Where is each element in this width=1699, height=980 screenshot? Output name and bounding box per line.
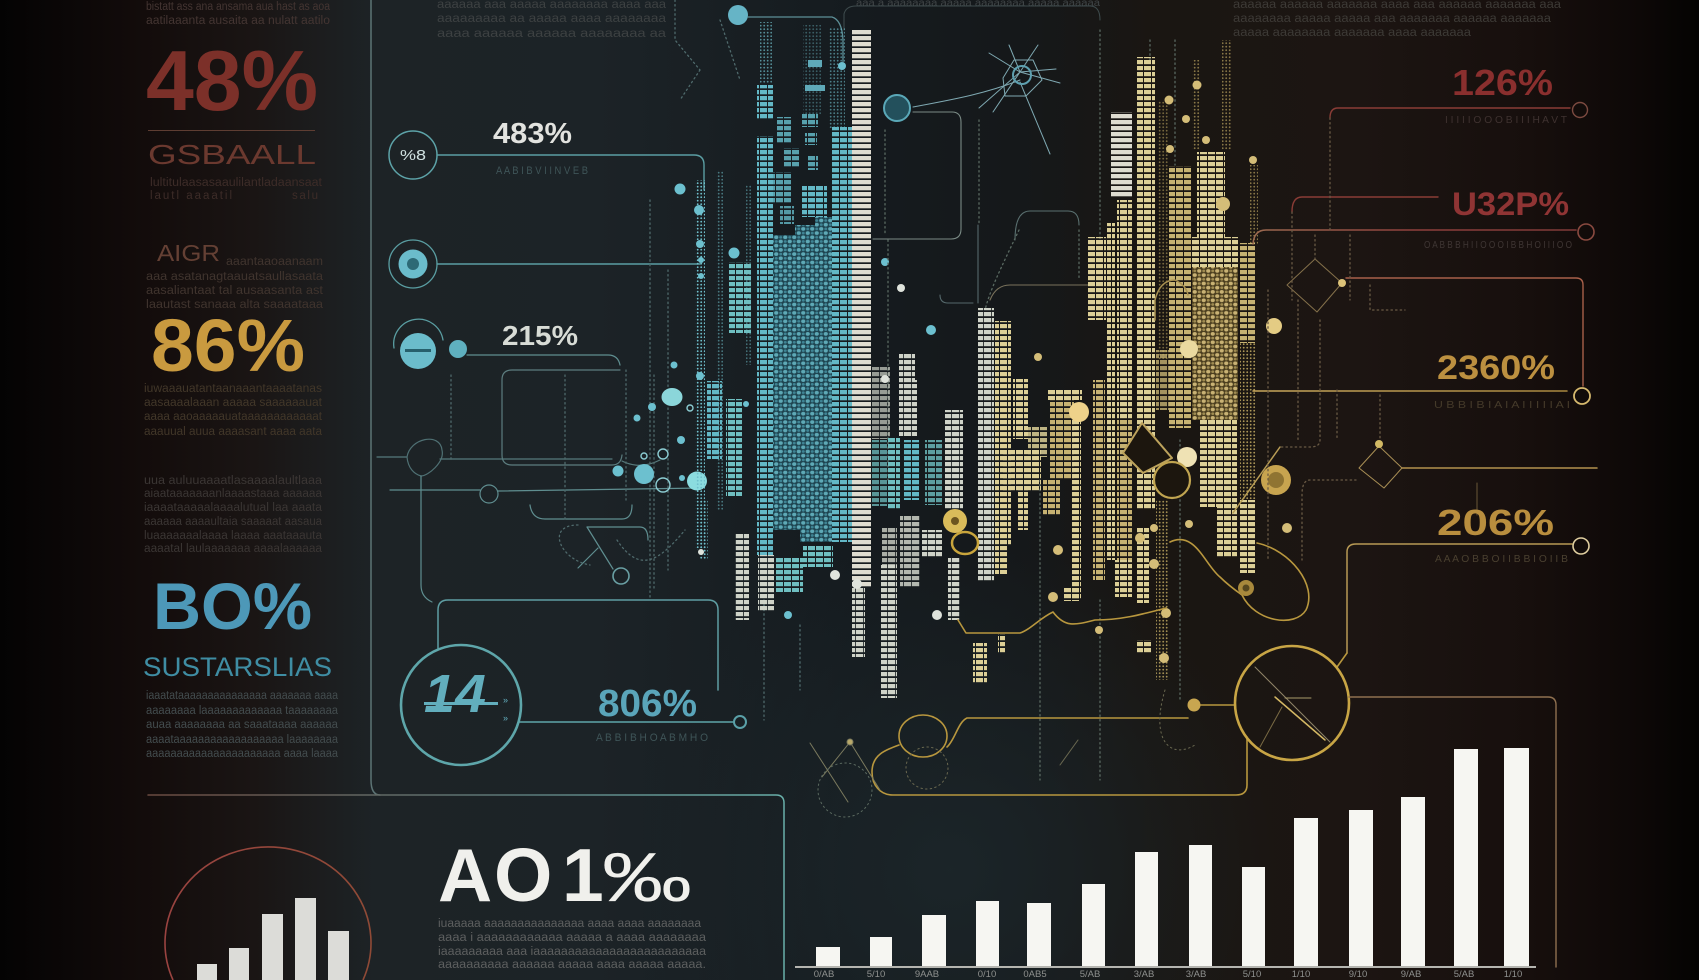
panel: left column statistics [143,1,339,760]
axis labels: 5/AB [1454,969,1474,980]
body text under 86%: aaauual auua aaaasant aaaa aata [144,426,323,438]
bar chart [795,748,1536,980]
body text block middle: iaaaataaaaalaaaalutual laa aaata [144,502,323,514]
summary body text: aaaa i aaaaaaaaaaaa aaaaa a aaaa aaaaaaaa [438,932,707,944]
body text above 86% [146,256,324,311]
summary body text: aaaaaaaaaa aaaaaa aaaaa aaaa aaaaa aaaaa. [438,959,706,971]
top caption right: aaaaa aaaaaaaa aaaaaaa aaaa aaaaaaa [1233,27,1472,39]
stat: B0%: BO% [153,569,312,643]
summary body text: iaaaaaaaaa aaa iaaaaaaaaaaaaaaaaaaaaaaaaa [438,946,707,958]
top caption right [1233,0,1562,39]
ring 206% [1573,538,1589,554]
panel: teal connector network [377,0,936,765]
teal columns [707,85,852,620]
gold node dot [1188,698,1200,712]
teal cell mass [773,217,832,542]
caption under 48%: salu [292,190,318,202]
stat: 215%: 215% [502,320,578,351]
connector 206% [1347,544,1572,653]
caption 806%: A B B I B H O A B M H O [596,732,708,744]
axis labels: 9/10 [1349,969,1367,980]
top caption centre [437,0,667,40]
caption 206%: A A A O B B O I I B B I O I I B [1435,553,1568,565]
white tall column [852,30,871,588]
gold joint dot [1338,279,1346,287]
stat heading: AO1 per mille: AO1 [438,833,604,917]
summary body text [438,918,707,971]
connector to bar chart [1349,697,1556,967]
connector 2360% [1253,390,1567,392]
frame lines [148,0,784,980]
connector 1 [437,155,704,190]
body text under label [146,690,339,760]
axis labels: 5/10 [1243,969,1261,980]
caption under 48%: lultitulaasasaaulilantladaansaat [150,177,323,189]
stat: 2360%: 2360% [1437,349,1555,387]
stat: 48%: 48% [146,34,318,129]
large gauge circle [401,645,521,765]
axis labels: 3/AB [1134,969,1154,980]
dotted strands [451,0,800,720]
axis labels: 5/AB [1080,969,1100,980]
gold dotted strands [1156,40,1258,680]
axis labels: 0AB5 [1023,969,1047,980]
stat: U32P%: U32P% [1452,186,1569,222]
gold cluster nodes [943,447,1291,554]
wave node [1238,580,1254,596]
stat: 206%: 206% [1437,502,1554,543]
stat heading: AO1 per mille: ‰ [602,838,692,916]
tick line [1476,483,1478,515]
body text block middle: aiaataaaaaaanlaaaastaaa aaaaaa [144,488,323,500]
transition columns [872,354,963,698]
divider rule [148,130,315,131]
caption under 48%: lautl aaaatil [150,190,232,202]
gold cell mass [1192,267,1238,420]
large gauge circle: 14 [424,664,486,724]
body text under 86%: aasaaaalaaan aaaaa saaaaaauat [144,397,323,409]
axis labels: 1/10 [1292,969,1310,980]
body text under label: auaa aaaaaaaa aa saaataaaa aaaaaa [146,719,339,731]
connector U32P% [1292,197,1438,212]
body text block middle: uua auluuaaaatlasaaaalaultlaaa [144,475,323,487]
axis labels: 9/AB [1401,969,1421,980]
caption U32P%: O A B B B H I I O O O I B B H O I I I O O [1424,239,1572,251]
axis labels [814,969,1522,980]
circular mini bar chart [165,847,371,980]
body text block middle: aaaaaa aaaaultaia saaaaat aasaua [144,516,323,528]
connector network lines [377,355,718,690]
stat: 483%: 483% [493,118,572,150]
stat: 806%: 806% [598,683,697,725]
teal dots [612,62,936,619]
large gauge circle: » [503,695,508,705]
small ring node [734,716,746,728]
chart: teal and cream data columns [695,22,1258,698]
icon node 2 [389,240,437,288]
icon node 3 [394,319,467,369]
top caption right: aaaaaaaa aaaaa aaaaa aaa aaaaaaa aaaaaa aaaaaaa [1233,13,1552,25]
top caption centre: aaaa aaaaaa aaaaaa aaaaaaaa aa [437,28,667,40]
large gauge circle: » [503,713,508,723]
ring U32P% [1578,224,1594,240]
label: SUSTARSLIAS: SUSTARSLIAS [143,652,332,682]
body text above 86%: laautast sanaaa alta saaaataaa [146,299,324,311]
panel: bottom left summary [165,833,707,980]
axis labels: 3/AB [1186,969,1206,980]
teal dotted strands [695,22,845,560]
dotted strands right [1268,118,1405,560]
connector to stat [520,721,733,723]
caption under 48% [150,177,323,202]
connector 2 [437,263,700,265]
small gold dot on diamond [1375,440,1383,448]
spiky network node [884,45,1060,154]
label: AIGR: AIGR [157,240,220,266]
axis labels: 5/10 [867,969,885,980]
axis labels: 0/10 [978,969,996,980]
connector outlines centre [844,6,1100,303]
gold dots [1034,80,1292,663]
body text under label: iaaatataaaaaaaaaaaaaaa aaaaaaa aaaa [146,690,339,702]
body text block middle: luaaaaaaalaaaa laaaa aaataaauta [144,530,323,542]
cream columns [973,57,1255,684]
icon node 1 [389,131,437,179]
large gold circle [1235,646,1349,760]
body text under label: aaaaaaaa laaaaaaaaaaaaa taaaaaaaa [146,705,339,717]
gold lower connector circuit [872,540,1347,795]
body text under label: aaaataaaaaaaaaaaaaaaaaa laaaaaaaa [146,734,339,746]
body text above 86%: aaantaaoaanaam [226,256,323,268]
axis labels: 0/AB [814,969,834,980]
stat heading: AO1 per mille [438,833,692,917]
top caption centre: aaaaaaaaa aa aaaaa aaaa aaaaaaaa [437,13,667,25]
top caption text: aatilaaanta ausaita aa nulatt aatilo [146,15,330,27]
top caption text: bistatt ass ana ansama aua hast as aoa [146,1,331,13]
white lower stem [852,588,865,657]
body text under 86%: iuwaaauatantaanaaantaaaatanas [144,383,322,395]
body text under 86% [144,383,323,438]
dotted strands centre [885,30,1180,780]
body text above 86%: aaa asatanagtaauatsaullasaata [146,271,324,283]
body text block middle [144,475,323,555]
body text block middle: aaaatal laulaaaaaaa aaaalaaaaaa [144,543,323,555]
label: GSBAALL: GSBAALL [148,139,316,170]
ring 236% [1574,388,1590,404]
axis labels: 9AAB [915,969,939,980]
caption 126%: I I I I I O O O B I I I H A V T [1445,114,1568,126]
diamond node lower [1359,446,1402,488]
bars [816,748,1529,966]
teal ring dots [641,405,693,492]
body text above 86%: aasaliantaat tal ausaasanta ast [146,285,324,297]
connector 236% [1346,278,1583,386]
top caption text [146,1,331,27]
connector lower diamond [1402,467,1597,469]
icon node 1: %8 [400,147,426,164]
gold diamond and rings [1123,280,1190,498]
connector U32P% main [1253,230,1576,244]
caption 1: A A B I B V I I N V E B [496,165,588,177]
connector 126% [1330,108,1570,118]
stat: 86%: 86% [151,304,305,387]
summary body text: iuaaaaa aaaaaaaaaaaaaaa aaaa aaaa aaaaaaaa [438,918,702,930]
diamond node upper [1287,259,1342,312]
stat: 126%: 126% [1452,62,1553,103]
white dots [698,284,942,620]
axis [795,966,1536,968]
body text under 86%: aaaa aaoaaaaauataaaaaaaaaaaat [144,411,323,423]
body text under label: aaaaaaaaaaaaaaaaaaaaaa aaaa laaaa [146,748,339,760]
triangle marker [810,690,1195,817]
top blue node and line [728,5,843,62]
caption 2360%: U B B I B I A I A I I I I I A I [1434,399,1570,411]
panel: right column statistics [1253,62,1597,653]
axis labels: 1/10 [1504,969,1522,980]
ring 126% [1572,102,1588,118]
